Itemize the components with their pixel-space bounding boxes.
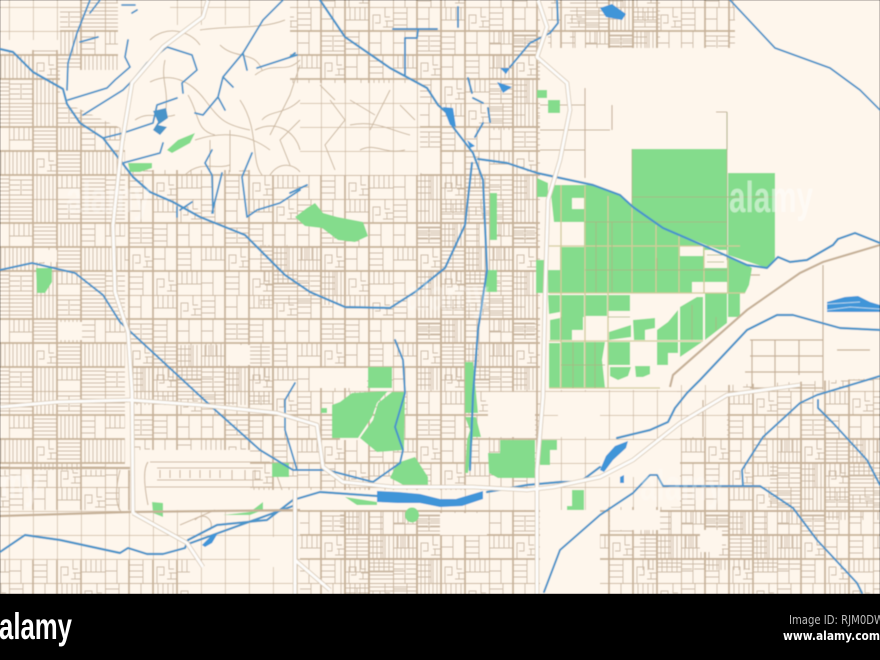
lake: river ponds bbox=[202, 441, 628, 547]
irregular foothill streets bbox=[135, 20, 415, 175]
canal: arizona north bbox=[320, 0, 487, 470]
park: central strips bbox=[486, 193, 497, 292]
watermark: east: alamy bbox=[729, 173, 813, 222]
park: papago east bbox=[360, 392, 405, 452]
roads inside parks bbox=[549, 185, 745, 388]
canal: southern arc bbox=[544, 475, 862, 593]
park: left of freeway bbox=[536, 178, 548, 293]
park: round south bbox=[405, 508, 419, 522]
river: west diagonal bbox=[0, 263, 405, 482]
south east roads bbox=[678, 250, 870, 437]
airport runways and buildings bbox=[116, 462, 282, 530]
cream holes with streets in farmland bbox=[572, 198, 727, 293]
park: canal strip upper bbox=[465, 362, 478, 413]
park: small west bbox=[321, 408, 327, 413]
park: block row 3 bbox=[657, 293, 740, 340]
park: north ribbon bbox=[167, 133, 195, 153]
park: north block bbox=[632, 149, 727, 253]
canal: central arizona bbox=[478, 159, 880, 268]
park: small top north bbox=[537, 90, 560, 113]
watermark: west: alamy bbox=[66, 173, 150, 222]
watermark: alamy logos bbox=[0, 173, 813, 510]
parks bbox=[36, 90, 775, 522]
park: east block bbox=[728, 173, 775, 268]
streams: top centre bbox=[290, 0, 558, 193]
lake: north ponds bbox=[443, 4, 626, 148]
streams: north west bbox=[67, 0, 300, 217]
cream open blocks bbox=[35, 150, 722, 567]
watermark: centre: alamy bbox=[405, 271, 489, 320]
park: river square bbox=[272, 463, 289, 477]
park: south central block bbox=[488, 440, 535, 478]
park: west square bbox=[36, 268, 52, 293]
sparse street grid bbox=[0, 0, 727, 594]
watermark: south: alamy bbox=[640, 461, 724, 510]
park: papago north bbox=[368, 367, 392, 388]
north east roads bbox=[540, 88, 727, 178]
park: south bbox=[567, 490, 584, 510]
canal: branch bbox=[285, 383, 297, 470]
canal: arizona west bbox=[0, 49, 472, 308]
park: north west bbox=[128, 163, 152, 172]
lake: salt river bbox=[377, 491, 483, 507]
park: south central small bbox=[540, 440, 557, 465]
watermark: south west: my bbox=[0, 459, 40, 508]
park: airport east bbox=[223, 502, 263, 515]
major roads bbox=[0, 245, 880, 516]
lake: basin stripes bbox=[827, 302, 880, 310]
park: main mass bbox=[548, 185, 752, 293]
footer bar bbox=[0, 594, 880, 660]
lake: east basin bbox=[827, 296, 880, 312]
river: salt west bbox=[0, 492, 377, 554]
park: block row 2 bbox=[550, 317, 655, 340]
canal: south east bbox=[487, 315, 880, 492]
park: block row 4 bbox=[549, 342, 702, 388]
park: papago west bbox=[332, 391, 388, 438]
footer: alamy logo: alamy bbox=[0, 606, 72, 647]
park: river bank bbox=[345, 497, 377, 505]
park: canal strip lower bbox=[465, 417, 481, 473]
canal: south east branches bbox=[742, 376, 880, 486]
park: central foothill bbox=[295, 203, 368, 242]
park: airport west bbox=[152, 502, 163, 517]
minor roads inside parks bbox=[561, 112, 775, 388]
park: papago south bbox=[390, 457, 428, 489]
canal: north east corner bbox=[730, 0, 880, 110]
park: block row 1 bbox=[548, 295, 630, 317]
lake: north west ponds bbox=[153, 108, 168, 135]
